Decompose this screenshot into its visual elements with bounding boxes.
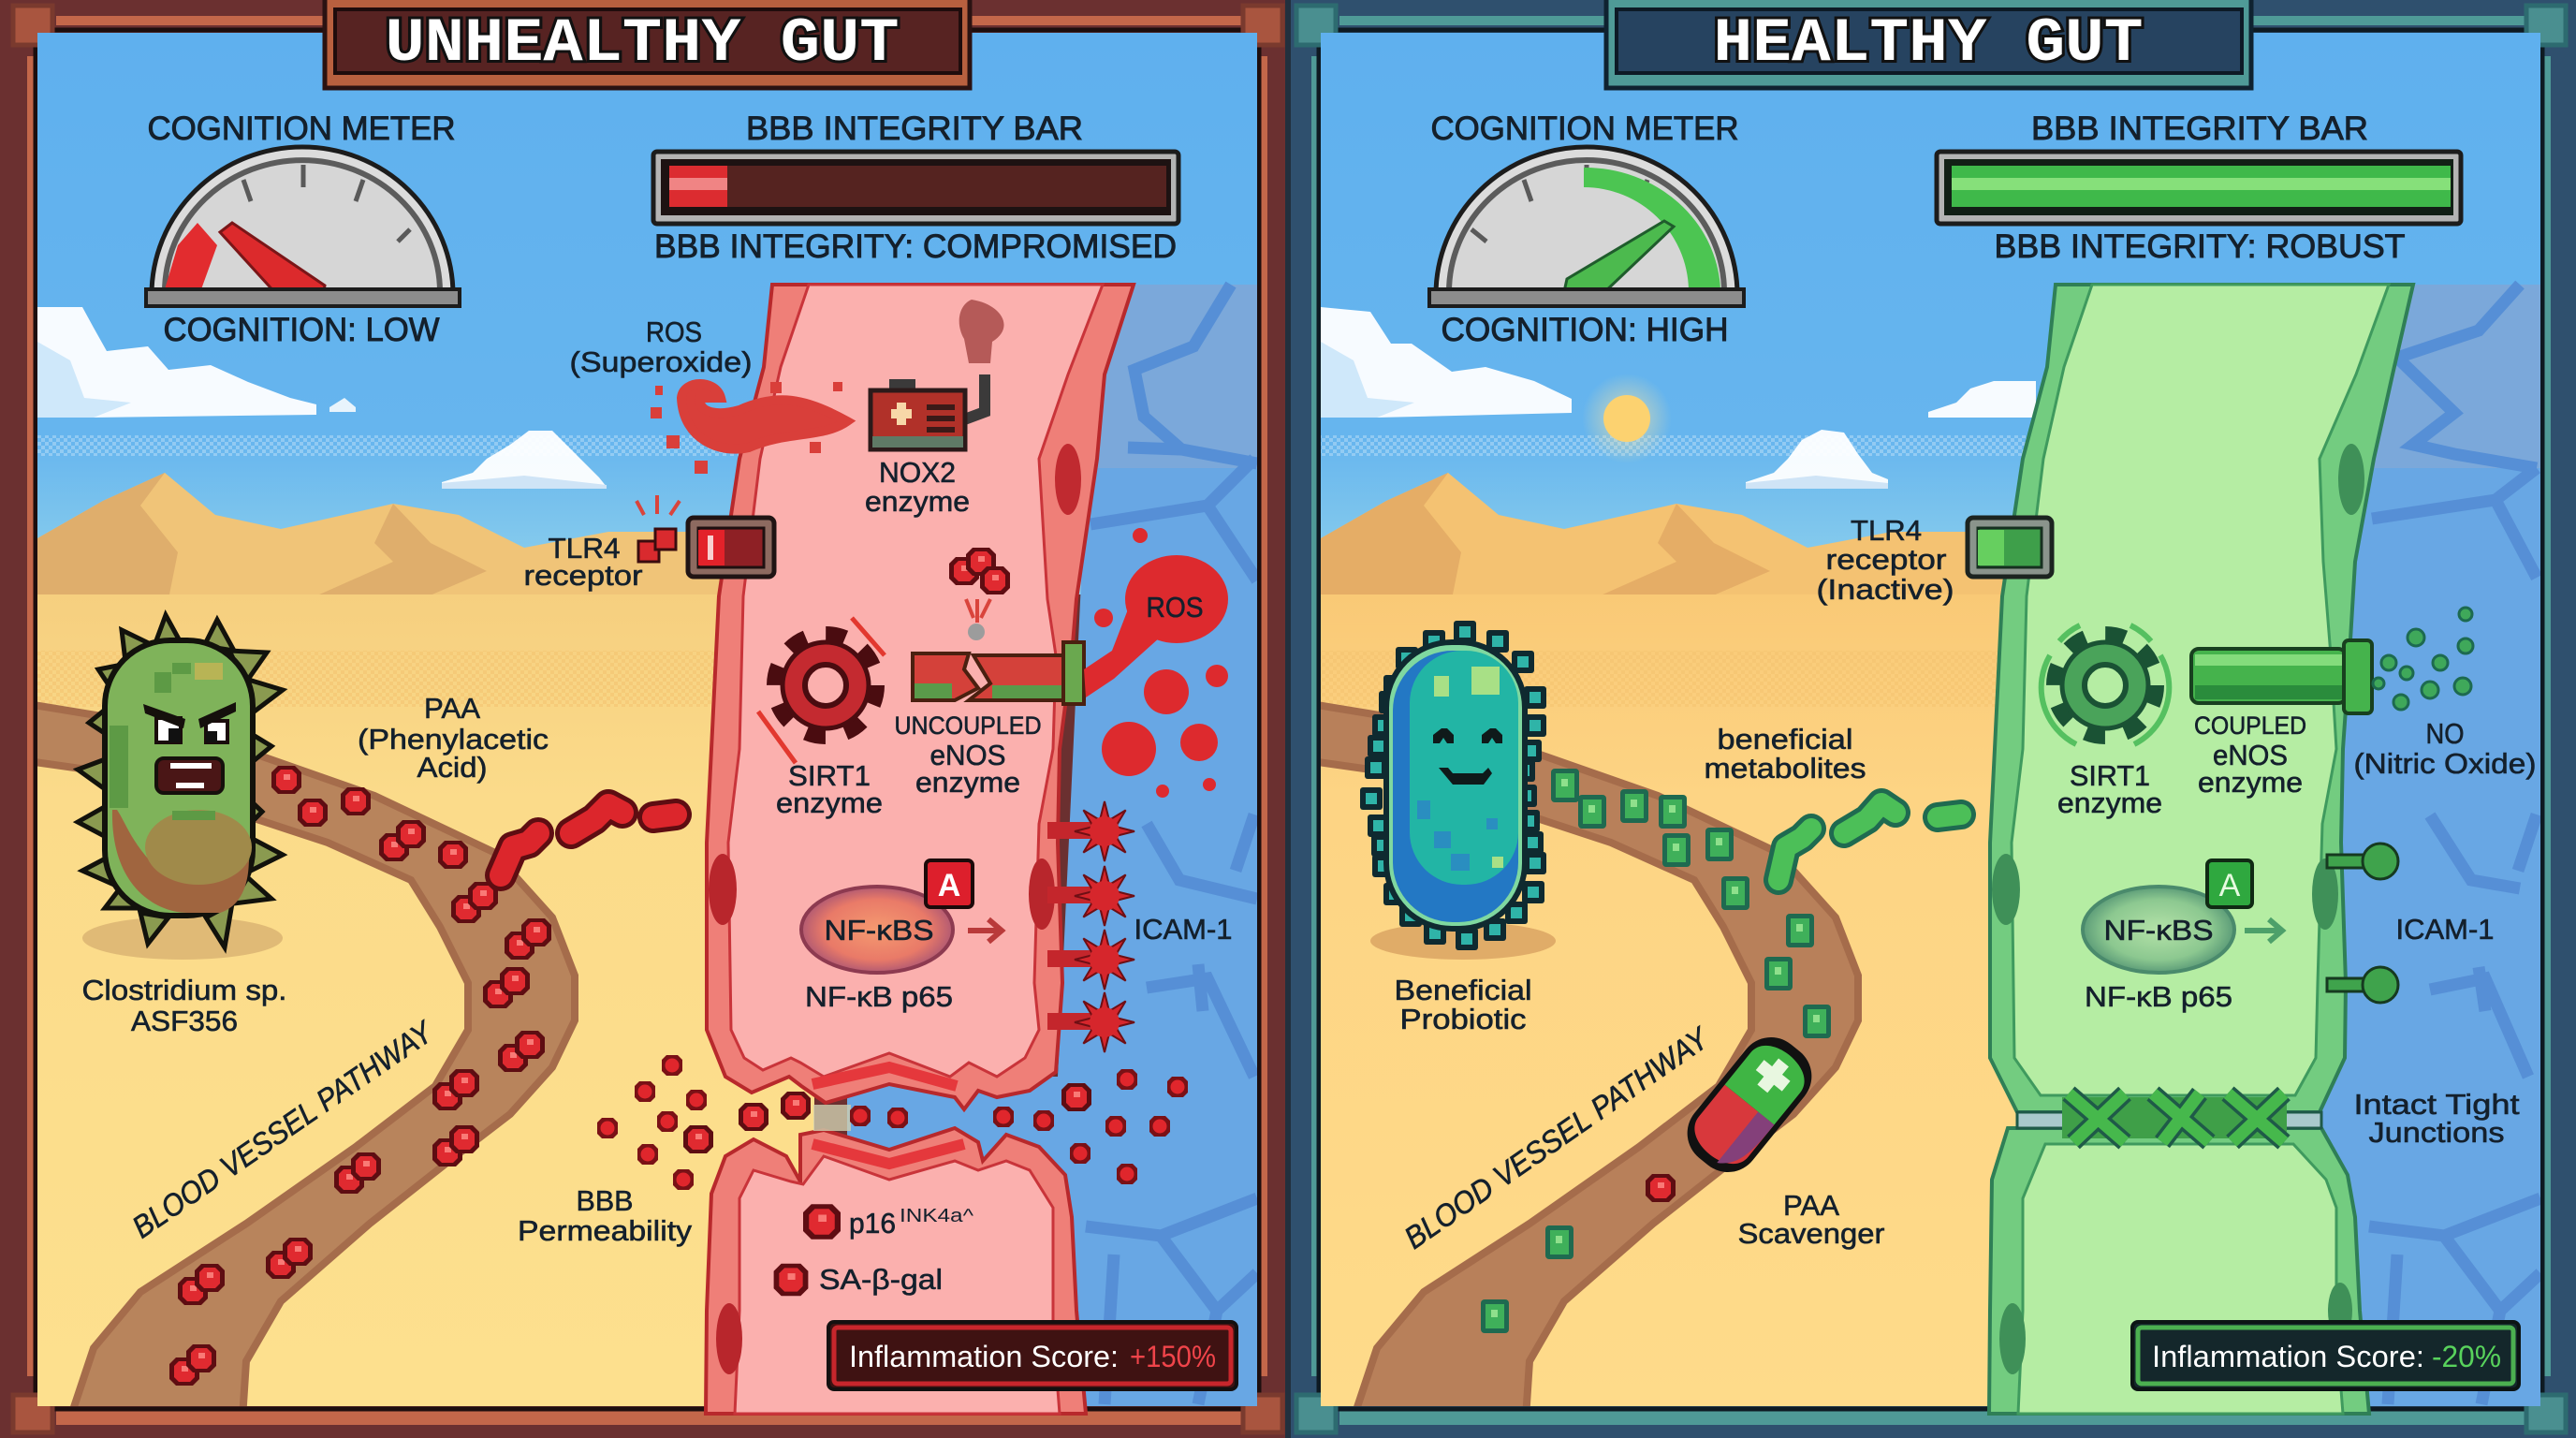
label: TLR4 receptor: receptor [524,559,642,592]
icon: NF-kB active: NF-κBS [824,914,934,946]
label: PAA phenylacetic acid: (Phenylacetic [358,723,549,756]
gauge: cognition low [146,147,460,306]
label: PAA scavenger: Scavenger [1737,1217,1885,1250]
scene: sky, sun and desert [1321,33,2540,1409]
inflammation score badge: +150%: Inflammation Score: [849,1340,1119,1373]
label: TLR4 receptor inactive: receptor [1825,543,1947,576]
label: TLR4 receptor: TLR4 [549,532,620,565]
frame: healthy panel [1285,0,2576,1438]
label: TLR4 receptor [524,532,642,592]
label: PAA phenylacetic acid: PAA [424,692,480,725]
label: coupled eNOS enzyme: enzyme [2198,766,2303,799]
label: NOX2 enzyme [865,456,970,518]
sinuous blood vessel pathway [28,704,575,1418]
label: Clostridium sp. ASF356 [82,974,286,1037]
label: SIRT1 enzyme unhealthy: enzyme [776,786,883,819]
label: coupled eNOS enzyme: COUPLED [2194,712,2306,740]
label: blood vessel pathway: BLOOD VESSEL PATHWAY [125,1014,440,1244]
label: blood vessel pathway healthy: BLOOD VESSEL PATHWAY [1398,1020,1716,1255]
title banner: unhealthy gut: UNHEALTHY GUT [386,8,899,79]
label: ROS superoxide: ROS [646,315,702,348]
icon: NF-kB active [801,860,1002,973]
label: uncoupled eNOS enzyme: UNCOUPLED [895,712,1041,740]
icon: NOX2 enzyme [871,300,1004,449]
label: beneficial probiotic: Probiotic [1400,1003,1526,1035]
label: uncoupled eNOS enzyme: enzyme [915,766,1020,799]
label: NO nitric oxide: NO [2426,717,2464,750]
label: uncoupled eNOS enzyme: eNOS [930,739,1005,771]
label: ROS superoxide: (Superoxide) [569,345,753,378]
label: ICAM-1 healthy: ICAM-1 [2396,913,2494,946]
label: PAA scavenger: PAA [1783,1189,1839,1222]
scene: sky and desert [37,33,1257,1409]
ICAM-1 spiked receptors [1047,801,1134,1052]
label: beneficial metabolites [1704,723,1866,785]
label: ICAM-1 unhealthy: ICAM-1 [1134,913,1232,946]
label: ROS superoxide [569,315,753,378]
frame: unhealthy panel [0,0,1288,1438]
sinuous blood vessel pathway healthy [1311,704,1858,1418]
title banner: healthy gut: HEALTHY GUT [1713,8,2144,79]
senescence marker p16: p16 [849,1207,896,1240]
vessel cell: lower healthy endothelium [1989,1128,2369,1414]
BBB compromised label: BBB INTEGRITY: COMPROMISED [654,228,1177,265]
cognition high label: COGNITION: HIGH [1442,312,1728,348]
label: BBB permeability [518,1184,693,1247]
inflammation score badge: -20%: Inflammation Score: [2152,1340,2424,1373]
label: TLR4 receptor inactive [1816,514,1954,606]
label: beneficial metabolites: metabolites [1704,752,1866,785]
panel: unhealthy gut [0,0,1288,1438]
label: intact tight junctions [2353,1088,2520,1149]
gauge: cognition high [1429,147,1744,306]
brain tissue with capillaries healthy [2321,285,2546,1408]
label: SIRT1 enzyme healthy: SIRT1 [2070,759,2150,792]
cognition meter heading: COGNITION METER [148,110,455,147]
label: NOX2 enzyme: enzyme [865,485,970,518]
icon: TLR4 receptor active [637,495,774,577]
nitric oxide particles [2373,608,2473,710]
BBB integrity bar: compromised [653,152,1178,224]
inflammation score badge: -20% [2132,1322,2519,1389]
label: NO nitric oxide [2353,717,2537,780]
PAA particle stream to vessel [501,805,676,875]
label: SIRT1 enzyme healthy: enzyme [2057,786,2162,819]
label: beneficial probiotic [1395,974,1531,1035]
label: beneficial metabolites: beneficial [1717,723,1853,756]
label: SIRT1 enzyme unhealthy: SIRT1 [788,759,871,792]
label: PAA phenylacetic acid: Acid) [417,751,487,784]
brain tissue with capillaries [847,285,1257,1406]
inflammation score badge: -20%: -20% [2432,1340,2501,1373]
title banner: unhealthy gut [325,0,970,88]
label: NOX2 enzyme: NOX2 [879,456,956,489]
label: uncoupled eNOS enzyme [895,712,1041,799]
icon: PAA scavenger pill [1675,1024,1824,1185]
cognition meter heading healthy: COGNITION METER [1430,110,1739,147]
icon: NF-kB inactive: A [2219,868,2241,903]
ICAM-1 resting receptors [2327,844,2398,1003]
label: PAA scavenger [1737,1189,1885,1250]
ROS burst in brain tissue: ROS [1146,591,1204,624]
leaking particles through BBB gap [597,1055,1188,1190]
label: coupled eNOS enzyme: eNOS [2213,739,2288,771]
label: SIRT1 enzyme healthy [2057,759,2162,819]
senescence marker SA-beta-gal [774,1263,943,1296]
vessel cell: upper healthy endothelium [1990,285,2413,1112]
character: beneficial probiotic [1360,621,1556,960]
ROS cluster above eNOS [949,548,1010,640]
BBB integrity bar: robust [1937,152,2461,224]
vessel cell: lower endothelium [706,1105,1086,1414]
label: beneficial probiotic: Beneficial [1395,974,1531,1006]
label: intact tight junctions: Junctions [2368,1116,2505,1149]
icon: SIRT1 gear damaged [758,618,885,763]
BBB bar heading healthy: BBB INTEGRITY BAR [2031,110,2368,147]
character: Clostridium bacterium [78,615,283,960]
label: coupled eNOS enzyme [2194,712,2306,799]
label: NF-kB p65 healthy: NF-κB p65 [2085,980,2232,1013]
label: TLR4 receptor inactive: (Inactive) [1816,573,1954,606]
label: PAA phenylacetic acid [358,692,549,784]
panel: healthy gut [1285,0,2576,1438]
ROS burst in brain tissue [1084,528,1228,798]
icon: TLR4 receptor inactive [1968,518,2052,577]
icon: NF-kB inactive: NF-κBS [2104,914,2213,946]
label: BBB permeability: BBB [577,1184,633,1217]
label: NO nitric oxide: (Nitric Oxide) [2353,747,2537,780]
label: Clostridium sp. ASF356: Clostridium sp. [82,974,286,1006]
inflammation score badge: +150%: +150% [1130,1340,1216,1373]
inflammation score badge: +150% [828,1322,1237,1389]
icon: NF-kB inactive [2083,860,2282,973]
senescence marker SA-beta-gal: SA-β-gal [819,1263,943,1296]
ROS superoxide swirl [651,382,847,474]
BBB bar heading: BBB INTEGRITY BAR [746,110,1083,147]
BBB robust label: BBB INTEGRITY: ROBUST [1994,228,2406,265]
icon: broken eNOS tube [913,642,1084,704]
label: Clostridium sp. ASF356: ASF356 [131,1005,238,1037]
icon: NF-kB active: A [938,868,960,903]
label: BBB permeability: Permeability [518,1214,693,1247]
metabolite particles on pathway [1481,769,1831,1333]
senescence marker p16: INK4a^ [900,1206,974,1226]
title banner: healthy gut [1606,0,2251,88]
icon: SIRT1 gear healthy [2042,625,2169,744]
metabolite stream to vessel [1778,803,1961,880]
senescence marker p16 [803,1204,974,1240]
icon: coupled eNOS tube [2191,640,2372,713]
label: NF-kB p65 unhealthy: NF-κB p65 [805,980,953,1013]
label: SIRT1 enzyme unhealthy [776,759,883,819]
PAA particles on pathway [169,766,551,1386]
tight junctions woven [2017,1093,2321,1142]
label: TLR4 receptor inactive: TLR4 [1851,514,1922,547]
label: intact tight junctions: Intact Tight [2353,1088,2520,1121]
cognition low label: COGNITION: LOW [163,312,440,348]
vessel cell: upper endothelium [707,285,1134,1109]
